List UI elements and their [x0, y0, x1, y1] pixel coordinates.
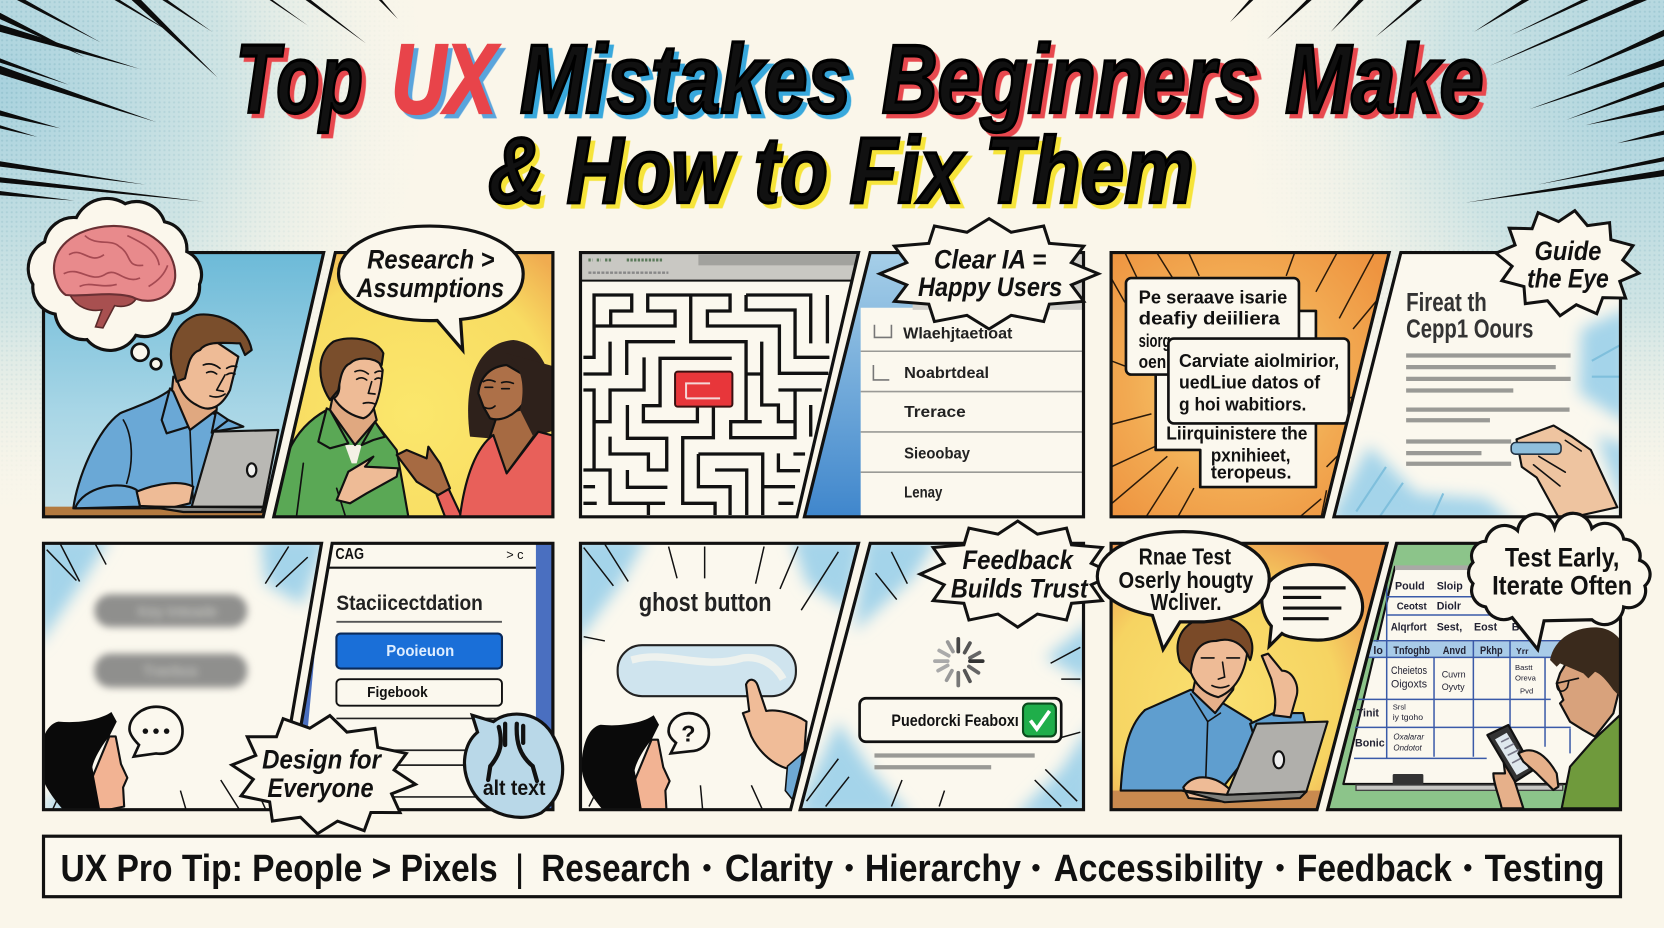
whiteboard table: Eost — [1474, 622, 1498, 634]
overlapping card: first — [1126, 278, 1299, 375]
whiteboard table: Sloip — [1437, 580, 1463, 592]
footer banner: • — [1463, 855, 1472, 883]
icon: brain — [54, 226, 175, 328]
whiteboard table: Oigoxts — [1391, 679, 1427, 691]
speech bubble: test note: Oserly hougty — [1119, 567, 1253, 593]
whiteboard table: Srsl — [1393, 702, 1406, 711]
whiteboard table: Anvd — [1443, 645, 1466, 657]
speech bubble: Research > Assumptions: Research > — [367, 244, 495, 274]
cloud callout: Test Early, Iterate Often: Test Early, — [1505, 543, 1619, 573]
whiteboard table: Pkhp — [1480, 645, 1503, 657]
primary button — [336, 634, 502, 669]
table — [1111, 791, 1323, 811]
whiteboard table: Cuvrn — [1442, 669, 1466, 679]
burst: Feedback Builds Trust — [920, 521, 1115, 627]
speed lines: top left — [0, 0, 398, 202]
burst: Guide the Eye: the Eye — [1527, 264, 1609, 294]
overlapping card: front: g hoi wabitiors. — [1179, 395, 1306, 415]
burst: Design for Everyone: Everyone — [267, 773, 374, 803]
whiteboard table: Alqrfort — [1391, 622, 1427, 634]
panel: clear navigation list — [801, 219, 1098, 518]
navigation list: Lenay — [904, 485, 942, 502]
burst: Clear IA = Happy Users — [880, 219, 1098, 329]
burst: Design for Everyone — [226, 706, 422, 843]
user silhouette — [582, 715, 670, 816]
whiteboard table: Yrr — [1516, 646, 1529, 656]
overlapping card: front: Carviate aiolmirior, — [1179, 351, 1339, 371]
whiteboard table: Diolr — [1437, 600, 1461, 612]
footer banner: Accessibility — [1054, 847, 1264, 890]
cloud callout: Test Early, Iterate Often — [1469, 513, 1650, 649]
footer banner: | — [515, 847, 525, 890]
navigation list: Sieoobay — [904, 445, 970, 462]
browser bar — [582, 254, 856, 282]
whiteboard table: Sest, — [1437, 622, 1462, 634]
man explaining — [1121, 616, 1307, 801]
thought bubble with brain — [28, 198, 201, 369]
burst: Feedback Builds Trust: Builds Trust — [951, 573, 1089, 603]
blue speed burst — [794, 536, 1093, 817]
title word: Beginners: Beginners — [882, 24, 1259, 133]
panel: man presenting test findings — [1097, 532, 1392, 811]
footer banner: Hierarchy — [865, 847, 1022, 890]
red target button — [675, 372, 732, 407]
panel: whiteboard usability test — [1324, 513, 1650, 811]
blue corner glow — [45, 544, 320, 808]
speech bubble: test note — [1097, 532, 1269, 649]
whiteboard table: Oxalarar — [1393, 732, 1424, 741]
speech bubble: Research > Assumptions: Assumptions — [356, 273, 504, 303]
whiteboard table: iy tgoho — [1393, 712, 1423, 722]
hand pointing — [743, 680, 807, 806]
footer banner: Research — [541, 847, 691, 890]
overlapping card: front — [1168, 339, 1349, 423]
footer banner — [44, 836, 1620, 897]
question bubble: ? — [681, 721, 696, 747]
speech bubble with dots — [129, 707, 183, 757]
spinner — [935, 639, 983, 686]
whiteboard table: Cheietos — [1391, 665, 1427, 677]
heading text: Cepp1 Oours — [1406, 315, 1533, 343]
primary button: Pooieuon — [386, 643, 454, 660]
whiteboard table: Ondotot — [1393, 744, 1423, 753]
tester with phone — [1487, 627, 1623, 808]
title word: Mistakes: Mistakes — [520, 24, 851, 133]
speech bubble: lines — [1262, 565, 1363, 646]
footer banner: • — [703, 855, 712, 883]
laptop — [150, 430, 278, 512]
panel: low contrast blurred buttons — [37, 536, 329, 817]
navigation list: Wlaehjtaetioat — [903, 326, 1013, 343]
user silhouette — [39, 712, 127, 813]
whiteboard table: Bonic — [1355, 738, 1385, 750]
question bubble — [669, 713, 709, 753]
footer banner: • — [1032, 855, 1041, 883]
navigation list — [861, 325, 1084, 502]
man in blue shirt — [73, 314, 252, 508]
whiteboard table: Tnfoghb — [1393, 645, 1430, 657]
whiteboard table: B — [1512, 622, 1520, 634]
burst: Guide the Eye: Guide — [1535, 236, 1602, 266]
burst: Clear IA = Happy Users: Happy Users — [918, 272, 1062, 302]
navigation list: Trerace — [904, 404, 966, 421]
maze — [583, 295, 829, 515]
footer banner: Clarity — [725, 847, 834, 890]
overlapping card: first: Pe seraave isarie — [1139, 287, 1287, 307]
footer banner: Feedback — [1297, 847, 1452, 890]
radial speed lines — [1111, 253, 1380, 517]
title word: Top: Top — [236, 24, 363, 133]
whiteboard table — [1343, 565, 1623, 790]
speech bubble: test note: Wcliver. — [1150, 589, 1221, 615]
title word: UX: UX — [392, 24, 499, 133]
label: ghost button: ghost button — [639, 589, 772, 617]
whiteboard table: Pvd — [1520, 686, 1533, 695]
blue glow — [1327, 308, 1629, 525]
overlapping card: back: Liirquinistere the — [1166, 423, 1307, 443]
whiteboard table: lo — [1373, 645, 1383, 657]
panel: ghost button — [573, 536, 865, 816]
navigation list: Noabrtdeal — [904, 365, 989, 382]
feedback field — [860, 698, 1061, 742]
panel: accessible interface — [226, 543, 563, 843]
ghost button shape — [618, 645, 796, 696]
footer banner: • — [845, 855, 854, 883]
panel: man thinking at laptop — [28, 198, 330, 520]
burst: Clear IA = Happy Users: Clear IA = — [934, 244, 1046, 274]
title line two: & How to Fix Them — [488, 118, 1194, 223]
background halftone corners — [0, 0, 1664, 466]
title word: Make: Make — [1285, 24, 1484, 133]
cloud callout: Test Early, Iterate Often: Iterate Often — [1492, 570, 1632, 600]
woman in red top — [397, 340, 557, 517]
blurred button one — [94, 594, 247, 627]
footer banner: UX Pro Tip: People > Pixels — [60, 847, 498, 890]
blurred button two: Tnerbos — [143, 664, 198, 680]
title — [236, 24, 1484, 223]
overlapping card: back: pxnihieet, — [1211, 446, 1290, 466]
grey text lines — [1406, 355, 1571, 464]
hand with highlighter — [1511, 426, 1617, 520]
burst: Feedback Builds Trust: Feedback — [963, 545, 1074, 575]
whiteboard table: Ceotst — [1397, 601, 1428, 612]
footer banner: • — [1276, 855, 1285, 883]
blurred button one: Key tnteade — [138, 605, 217, 621]
secondary button — [336, 679, 502, 706]
panel: research conversation — [271, 226, 557, 518]
whiteboard table: Oreva — [1515, 674, 1537, 683]
callout: alt text: alt text — [483, 777, 545, 800]
overlapping card: first: deafiy deiiliera — [1139, 309, 1281, 329]
panel: loading feedback — [794, 521, 1115, 817]
icon: green check — [1023, 704, 1056, 736]
speech bubble: test note: Rnae Test — [1139, 544, 1231, 570]
speech bubble: Research > Assumptions — [339, 226, 523, 350]
whiteboard table: Pould — [1395, 580, 1425, 592]
window bar: > c — [506, 547, 524, 562]
window bar — [327, 546, 536, 568]
whiteboard table: Tinit — [1357, 708, 1379, 720]
form heading: Staciicectdation — [336, 592, 483, 615]
heading text: Fireat th — [1406, 289, 1487, 317]
overlapping card: front: uedLiue datos of — [1179, 372, 1321, 392]
footer banner: Testing — [1485, 847, 1605, 890]
burst: Design for Everyone: Design for — [262, 744, 382, 774]
callout: alt text — [464, 714, 563, 817]
speed lines: top right — [1230, 0, 1664, 203]
laptop — [1182, 722, 1328, 802]
whiteboard table: Oyvty — [1442, 682, 1465, 692]
window bar: CAG — [335, 546, 364, 563]
panel: confusing maze navigation — [580, 250, 863, 518]
blue corner glow — [582, 544, 856, 646]
heading text — [1406, 289, 1533, 343]
overlapping card: back — [1156, 311, 1316, 487]
overlapping card: first: siorg — [1139, 331, 1171, 351]
feedback field: Puedorcki Feaboxı — [891, 711, 1019, 730]
blurred button two — [94, 654, 247, 688]
secondary button: Figebook — [367, 685, 428, 701]
burst: Guide the Eye — [1489, 201, 1646, 326]
man in green shirt — [273, 338, 408, 517]
panel: walls of text — [1111, 253, 1392, 518]
overlapping card: back: teropeus. — [1211, 463, 1292, 483]
overlapping card: first: oen — [1139, 352, 1166, 372]
whiteboard table: Bastt — [1515, 663, 1533, 672]
panel: visual hierarchy — [1327, 201, 1646, 525]
